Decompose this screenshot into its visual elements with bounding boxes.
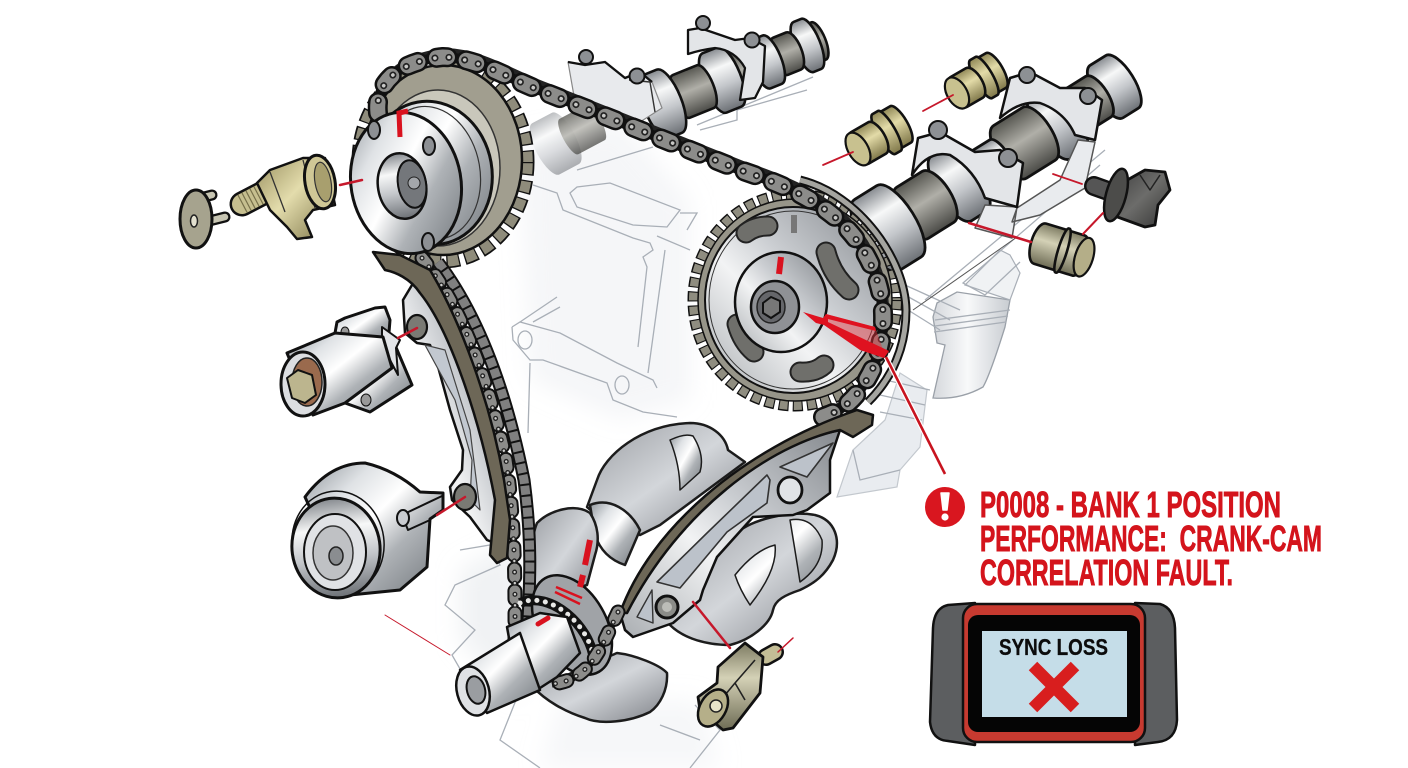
right cam sprocket	[694, 195, 896, 405]
sprocket teeth	[694, 195, 896, 405]
timing chain	[378, 51, 906, 650]
top-left sprocket teeth	[360, 64, 526, 260]
pedestals	[975, 140, 1095, 238]
part: lower sensor	[692, 643, 775, 732]
phaser cylinder	[356, 91, 504, 255]
part: lower pulley	[285, 463, 443, 604]
right camshaft	[841, 40, 1154, 279]
fault code text	[980, 484, 1322, 593]
red cross	[1033, 666, 1075, 708]
ghost cam under chain	[523, 94, 614, 179]
part: brass solenoid fitting	[242, 153, 339, 239]
crank sprocket and nose	[451, 540, 628, 719]
nose shaft	[460, 633, 540, 713]
alert icon	[925, 487, 965, 527]
part: olive plug	[1025, 219, 1099, 282]
plug A	[838, 101, 918, 174]
guide body	[620, 430, 840, 637]
upper strand behind	[381, 51, 886, 411]
collar	[507, 613, 580, 688]
screen label: SYNC LOSS	[999, 634, 1108, 660]
ghost piston	[933, 292, 1010, 398]
red timing marks	[580, 540, 590, 587]
lugs	[407, 315, 427, 339]
journal	[590, 503, 640, 565]
crank sprocket rollers	[520, 600, 594, 660]
slots	[737, 226, 849, 372]
left chain guide	[373, 252, 510, 563]
scan tool	[930, 603, 1177, 745]
right chain guide	[620, 410, 873, 637]
lobe bottom	[533, 653, 667, 722]
top camshaft	[568, 7, 838, 143]
lobe right	[670, 514, 837, 645]
outer back strand	[800, 180, 906, 402]
left chain run	[422, 258, 515, 650]
left chain outer strand	[438, 262, 530, 620]
bearing cap 1	[912, 121, 1023, 207]
guide wear strip	[620, 410, 873, 613]
screen	[982, 631, 1127, 717]
red timing mark	[399, 111, 408, 137]
plug B	[937, 48, 1013, 117]
bearing cap 2	[1000, 67, 1102, 140]
guide body	[403, 280, 500, 545]
top cam bearing cap 2	[688, 16, 765, 100]
guide wear strip	[373, 252, 510, 563]
top-left VVT phaser	[340, 91, 504, 262]
part: pin disc	[180, 190, 225, 248]
front disc	[340, 104, 472, 262]
top cam bearing cap 1	[568, 50, 662, 122]
red bezel	[963, 604, 1145, 742]
lower chain	[552, 612, 618, 684]
part: tensioner	[281, 307, 412, 416]
grips	[930, 603, 975, 745]
part: black sensor	[1094, 166, 1170, 227]
red mark	[779, 257, 781, 274]
crankshaft lobes	[532, 423, 837, 722]
upper chain run	[378, 57, 883, 417]
guide pockets	[657, 475, 770, 588]
hub	[735, 252, 827, 352]
ghost engine block	[445, 77, 1105, 768]
lobe front	[532, 508, 598, 600]
fault code text: CORRELATION FAULT.	[980, 552, 1233, 593]
fault pointer	[803, 312, 945, 474]
ghost lower cylinder	[837, 373, 927, 497]
part: brass plugs	[838, 48, 1013, 174]
lobe upper	[587, 423, 745, 535]
red leader lines	[340, 95, 1103, 655]
